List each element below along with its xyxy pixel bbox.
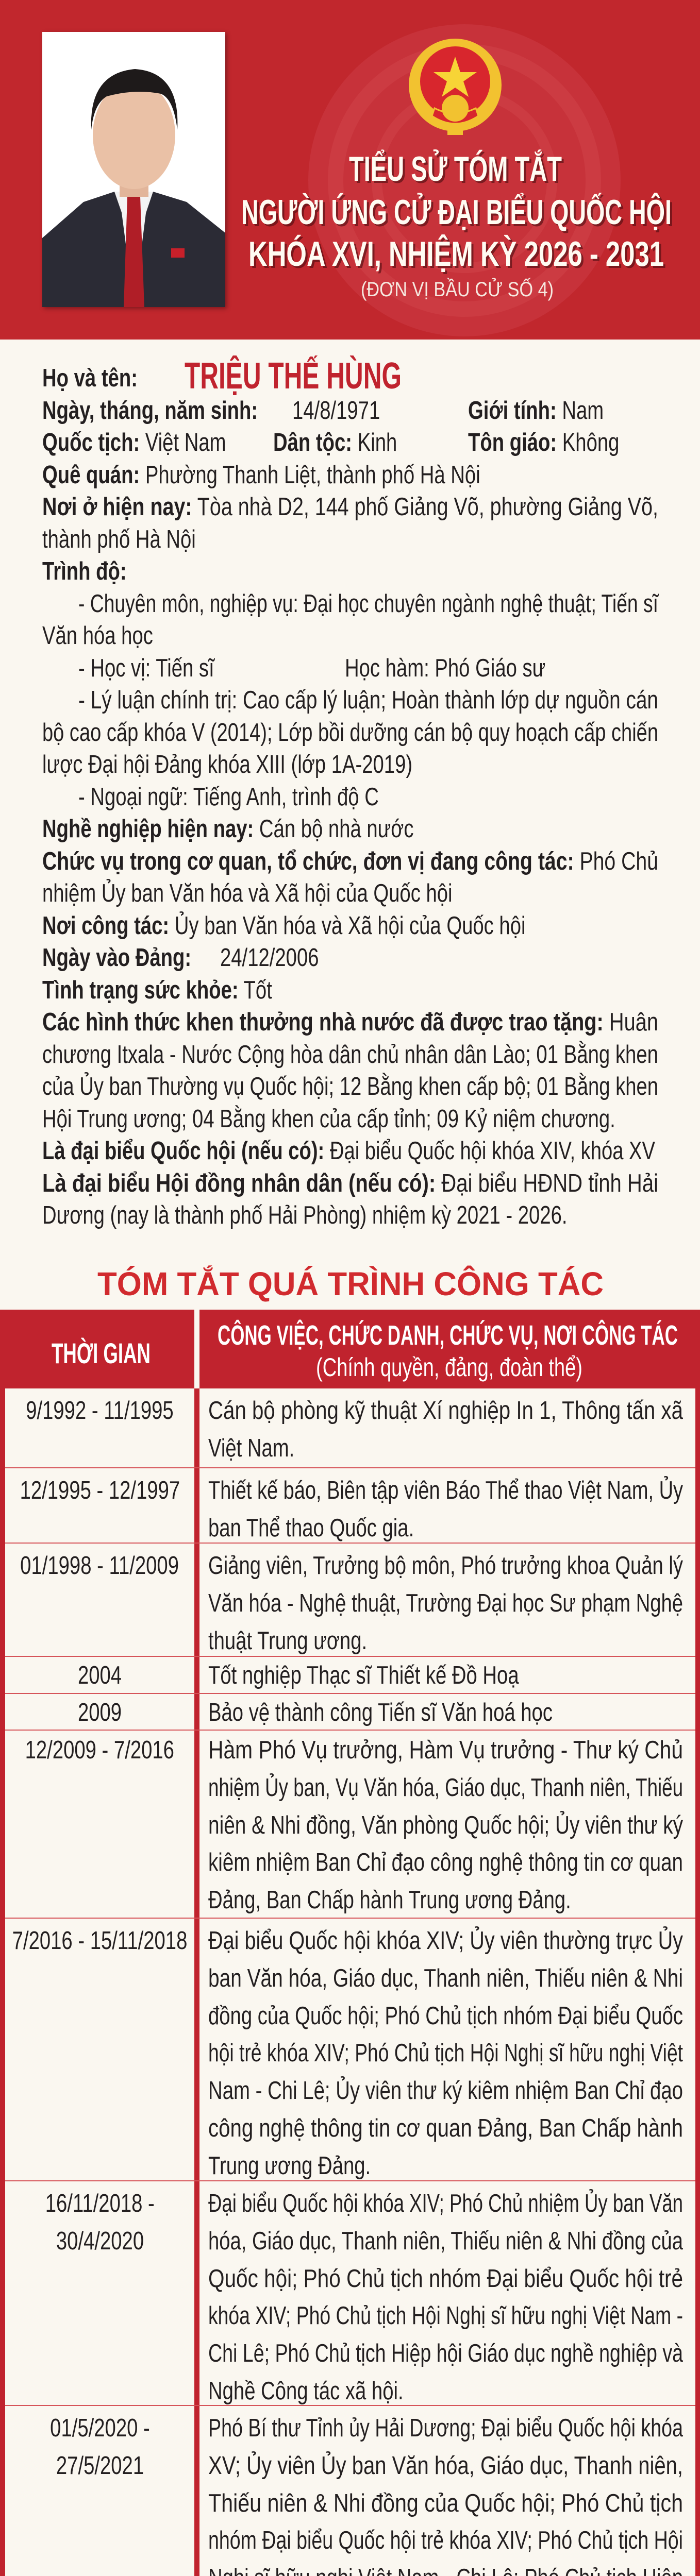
row: 2004	[5, 1656, 695, 1693]
table: work history	[0, 1310, 700, 2576]
panel: biography: Học hàm: Phó Giáo sư	[345, 654, 545, 682]
row: 2009	[5, 1693, 695, 1730]
row: 01/1998: thuật Trung ương.	[208, 1627, 367, 1655]
panel: biography: Các hình thức khen thưởng nhà nước đã được trao tặng: Huân	[42, 1008, 658, 1036]
panel: biography: - Lý luận chính trị: Cao cấp lý luận; Hoàn thành lớp dự nguồn cán	[78, 686, 658, 714]
row: 7/2016: Đại biểu Quốc hội khóa XIV; Ủy viên thường trực Ủy	[208, 1927, 683, 1955]
panel: biography: Tôn giáo: Không	[468, 429, 619, 456]
row: 16/11/2018: Quốc hội; Phó Chủ tịch nhóm Đại biểu Quốc hội trẻ	[208, 2265, 683, 2293]
row: 12/1995: Thiết kế báo, Biên tập viên Báo Thể thao Việt Nam, Ủy	[208, 1477, 683, 1504]
row: 16/11/2018: Chi Lê; Phó Chủ tịch Hiệp hội Giáo dục nghề nghiệp và	[208, 2340, 683, 2367]
row: 12/2009: Hàm Phó Vụ trưởng, Hàm Vụ trưởng - Thư ký Chủ	[208, 1736, 683, 1764]
icon: national emblem	[409, 39, 502, 135]
row: 2009: 2009	[78, 1699, 122, 1726]
panel: biography: Quê quán: Phường Thanh Liệt, thành phố Hà Nội	[42, 461, 480, 489]
row: 01/1998: 01/1998 - 11/2009	[21, 1552, 179, 1580]
row: 12/2009	[5, 1730, 695, 1918]
row: 01/5/2020	[5, 2405, 695, 2576]
panel: biography: chương Itxala - Nước Cộng hòa dân chủ nhân dân Lào; 01 Bằng khen	[42, 1041, 658, 1069]
title: TIỂU SỬ TÓM TẮT	[351, 151, 564, 191]
table header	[0, 1310, 700, 1388]
panel: biography: Nghề nghiệp hiện nay: Cán bộ nhà nước	[42, 815, 414, 843]
row: 7/2016: công nghệ thông tin cơ quan Đảng, Ban Chấp hành	[208, 2114, 683, 2142]
row: 12/1995: ban Thể thao Quốc gia.	[208, 1514, 414, 1542]
header panel	[0, 0, 700, 340]
row: 16/11/2018: hóa, Giáo dục, Thanh niên, Thiếu niên & Nhi đồng của	[208, 2227, 683, 2255]
row: 12/1995	[5, 1467, 695, 1543]
decorative drum pattern	[308, 24, 621, 336]
panel: biography: Dân tộc: Kinh	[273, 429, 397, 456]
table header: THỜI GIAN	[52, 1337, 151, 1369]
row: 01/5/2020: Phó Bí thư Tỉnh ủy Hải Dương; Đại biểu Quốc hội khóa	[208, 2414, 683, 2442]
row: 01/5/2020: nhóm Đại biểu Quốc hội trẻ khóa XIV; Phó Chủ tịch Hội	[208, 2527, 683, 2554]
row: 01/1998	[5, 1543, 695, 1656]
panel: biography: Văn hóa học	[42, 622, 153, 650]
photo	[42, 32, 225, 307]
table header: (Chính quyền, đảng, đoàn thể)	[316, 1353, 582, 1382]
panel: biography: 24/12/2006	[220, 944, 319, 972]
subtitle: (ĐƠN VỊ BẦU CỬ SỐ 4)	[361, 277, 554, 301]
panel: biography: Quốc tịch: Việt Nam	[42, 429, 226, 456]
heading: work history: TÓM TẮT QUÁ TRÌNH CÔNG TÁC	[97, 1265, 604, 1302]
panel: biography: nhiệm Ủy ban Văn hóa và Xã hội của Quốc hội	[42, 879, 453, 907]
title	[241, 149, 674, 301]
row: 12/2009: niên & Nhi đồng, Văn phòng Quốc hội; Ủy viên thư ký	[208, 1811, 683, 1839]
row: 9/1992: Việt Nam.	[208, 1434, 294, 1462]
row: 01/5/2020: 01/5/2020 -	[50, 2414, 149, 2442]
row: 16/11/2018: Nghề Công tác xã hội.	[208, 2377, 404, 2405]
row: 16/11/2018: khóa XIV; Phó Chủ tịch Hội Nghị sĩ hữu nghị Việt Nam -	[208, 2302, 683, 2330]
panel: biography: Giới tính: Nam	[468, 397, 604, 425]
row: 16/11/2018: 30/4/2020	[56, 2227, 144, 2255]
panel: biography: bộ cao cấp khóa V (2014); Lớp bồi dưỡng cán bộ quy hoạch cấp chiến	[42, 719, 658, 747]
panel: biography: 14/8/1971	[292, 397, 380, 425]
panel: biography: Là đại biểu Quốc hội (nếu có): Đại biểu Quốc hội khóa XIV, khóa XV	[42, 1137, 655, 1165]
panel: biography: Tình trạng sức khỏe: Tốt	[42, 976, 272, 1004]
row: 2004: 2004	[78, 1662, 122, 1689]
panel: biography: - Chuyên môn, nghiệp vụ: Đại học chuyên ngành nghệ thuật; Tiến sĩ	[78, 590, 658, 618]
row: 7/2016: 7/2016 - 15/11/2018	[12, 1927, 187, 1955]
row: 7/2016: đồng của Quốc hội; Phó Chủ tịch nhóm Đại biểu Quốc	[208, 2002, 683, 2030]
panel: biography: lược Đại hội Đảng khóa XIII (lớp 1A-2019)	[42, 751, 412, 778]
row: 01/5/2020: 27/5/2021	[56, 2452, 144, 2480]
panel: biography: thành phố Hà Nội	[42, 526, 196, 553]
row: 7/2016: Trung ương Đảng.	[208, 2152, 371, 2180]
panel: biography: Dương (nay là thành phố Hải Phòng) nhiệm kỳ 2021 - 2026.	[42, 1201, 568, 1229]
row: 9/1992	[26, 1397, 683, 1462]
row: 2004: Tốt nghiệp Thạc sĩ Thiết kế Đồ Hoạ	[208, 1662, 519, 1689]
row: 16/11/2018: Đại biểu Quốc hội khóa XIV; Phó Chủ nhiệm Ủy ban Văn	[208, 2190, 683, 2217]
panel: biography: Ngày, tháng, năm sinh:	[42, 397, 258, 425]
panel: biography: Là đại biểu Hội đồng nhân dân (nếu có): Đại biểu HĐND tỉnh Hải	[42, 1170, 658, 1197]
row: 7/2016: hội trẻ khóa XIV; Phó Chủ tịch Hội Nghị sĩ hữu nghị Việt	[208, 2039, 683, 2067]
panel: biography: của Ủy ban Thường vụ Quốc hội; 12 Bằng khen cấp bộ; 01 Bằng khen	[42, 1073, 658, 1100]
row: 16/11/2018	[5, 2180, 695, 2405]
name row: Họ và tên:	[42, 364, 138, 392]
row: 16/11/2018: 16/11/2018 -	[45, 2190, 155, 2217]
row: 2009: Bảo vệ thành công Tiến sĩ Văn hoá học	[208, 1699, 553, 1726]
row: 01/5/2020: Thiếu niên & Nhi đồng của Quốc hội; Phó Chủ tịch	[208, 2489, 683, 2517]
panel: biography: Nơi ở hiện nay: Tòa nhà D2, 144 phố Giảng Võ, phường Giảng Võ,	[42, 493, 658, 521]
panel: biography: Chức vụ trong cơ quan, tổ chức, đơn vị đang công tác: Phó Chủ	[42, 848, 658, 875]
row: 12/2009: 12/2009 - 7/2016	[25, 1736, 174, 1764]
panel: biography	[42, 355, 659, 1229]
row: 01/1998: Giảng viên, Trưởng bộ môn, Phó trưởng khoa Quản lý	[208, 1552, 683, 1580]
panel: biography: Trình độ:	[42, 557, 127, 585]
row: 12/2009: kiêm nhiệm Ban Chỉ đạo công nghệ thông tin cơ quan	[208, 1849, 683, 1876]
row: 7/2016: Nam - Chi Lê; Ủy viên thư ký kiêm nhiệm Ban Chỉ đạo	[208, 2077, 683, 2105]
row: 12/2009: Đảng, Ban Chấp hành Trung ương Đảng.	[208, 1886, 571, 1914]
row: 01/1998: Văn hóa - Nghệ thuật, Trường Đại học Sư phạm Nghệ	[208, 1589, 683, 1617]
panel: biography: - Học vị: Tiến sĩ	[78, 654, 214, 682]
table borders	[0, 1388, 5, 2576]
row: 9/1992: Cán bộ phòng kỹ thuật Xí nghiệp In 1, Thông tấn xã	[208, 1397, 683, 1425]
row: 12/2009: nhiệm Ủy ban, Vụ Văn hóa, Giáo dục, Thanh niên, Thiếu	[208, 1774, 683, 1802]
row: 12/1995: 12/1995 - 12/1997	[20, 1477, 180, 1504]
row: 7/2016: ban Văn hóa, Giáo dục, Thanh niên, Thiếu niên & Nhi	[208, 1964, 683, 1992]
row: 01/5/2020: XV; Ủy viên Ủy ban Văn hóa, Giáo dục, Thanh niên,	[208, 2452, 683, 2480]
title: TIỂU SỬ TÓM TẮT	[349, 149, 562, 189]
row: 9/1992: 9/1992 - 11/1995	[26, 1397, 174, 1425]
row: 7/2016	[5, 1918, 695, 2180]
panel: biography: Nơi công tác: Ủy ban Văn hóa và Xã hội của Quốc hội	[42, 912, 525, 940]
panel: biography: Ngày vào Đảng:	[42, 944, 191, 972]
panel: biography: - Ngoại ngữ: Tiếng Anh, trình độ C	[78, 783, 379, 811]
panel: biography: Hội Trung ương; 04 Bằng khen của cấp tỉnh; 09 Kỷ niệm chương.	[42, 1105, 615, 1133]
